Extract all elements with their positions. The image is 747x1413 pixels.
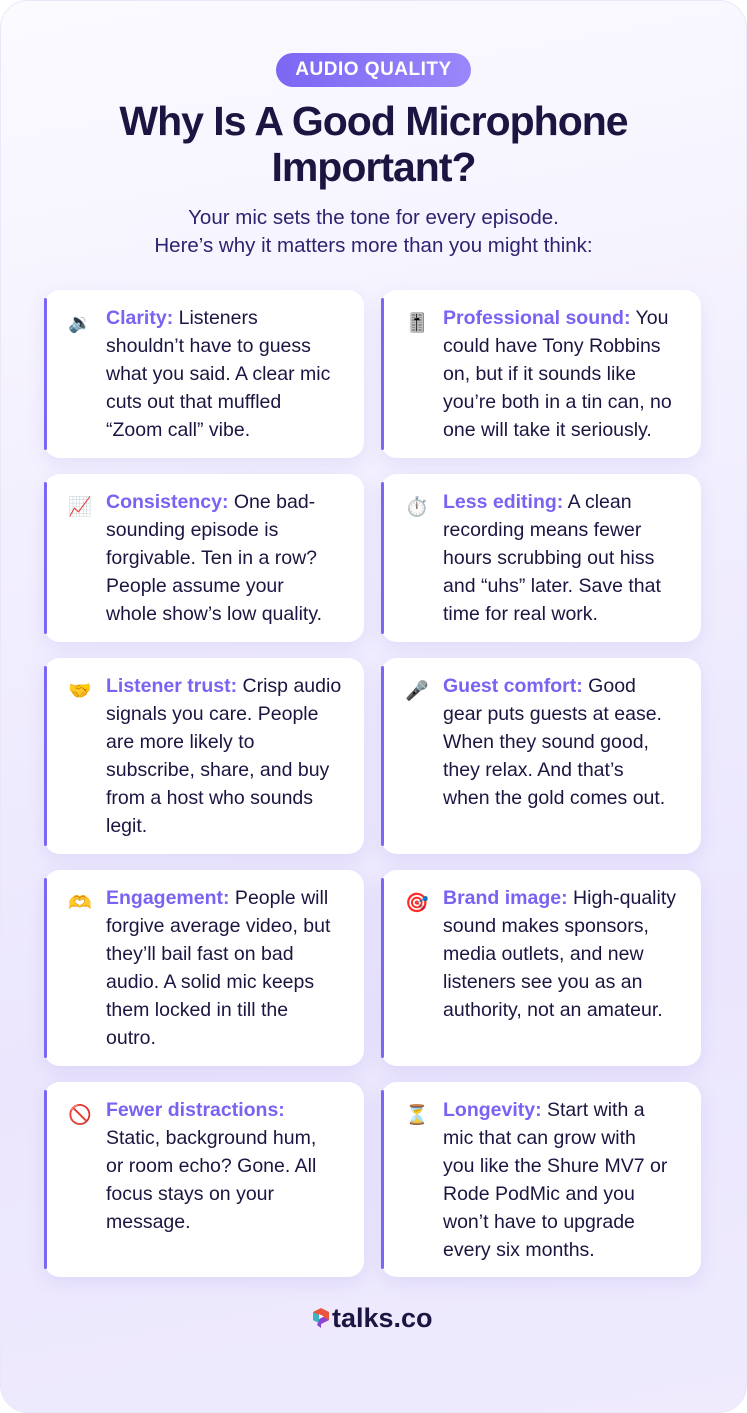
- card: guest comfort: 🎤: [405, 681, 429, 702]
- card: consistency: forgivable. Ten in a row?: [106, 547, 317, 569]
- card: engagement: them locked in till the: [106, 999, 288, 1021]
- card: clarity: 🔉: [68, 313, 92, 334]
- card: engagement: 🫶: [68, 893, 92, 914]
- card: listener trust: 🤝: [68, 681, 92, 702]
- card: less editing: ⏱️: [405, 497, 429, 518]
- card: longevity: won’t have to upgrade: [443, 1211, 635, 1233]
- badge: audio quality: [276, 53, 471, 87]
- card: listener trust: subscribe, share, and buy: [106, 759, 329, 781]
- card: brand image: media outlets, and new: [443, 943, 644, 965]
- card: guest comfort: [381, 658, 701, 854]
- title: Important?: [271, 144, 476, 190]
- card: engagement: [44, 870, 364, 1066]
- title: [119, 98, 628, 190]
- card: engagement: they’ll bail fast on bad: [106, 943, 294, 965]
- card: professional sound: could have Tony Robbins: [443, 335, 661, 357]
- card: consistency: Consistency: One bad-: [106, 491, 315, 513]
- card: consistency: [44, 474, 364, 642]
- card: less editing: [381, 474, 701, 642]
- card: clarity: [44, 290, 364, 458]
- title: Why Is A Good Microphone: [119, 98, 628, 144]
- card: brand image: listeners see you as an: [443, 971, 642, 993]
- card: brand image: Brand image: High-quality: [443, 887, 676, 909]
- card: longevity: ⏳: [405, 1105, 429, 1126]
- card: fewer distractions: 🚫: [68, 1105, 92, 1126]
- card: clarity: cuts out that muffled: [106, 391, 281, 413]
- card: guest comfort: Guest comfort: Good: [443, 675, 636, 697]
- logo: talks.co: talks.co: [332, 1302, 433, 1332]
- card: less editing: and “uhs” later. Save that: [443, 575, 661, 597]
- card: fewer distractions: or room echo? Gone. All: [106, 1155, 316, 1177]
- card: professional sound: you’re both in a tin can, no: [443, 391, 672, 413]
- card: longevity: you like the Shure MV7 or: [443, 1155, 667, 1177]
- card: listener trust: Listener trust: Crisp audio: [106, 675, 341, 697]
- card: longevity: every six months.: [443, 1239, 595, 1261]
- card: engagement: Engagement: People will: [106, 887, 328, 909]
- card: professional sound: [381, 290, 701, 458]
- card: fewer distractions: [44, 1082, 364, 1277]
- card: fewer distractions: Static, background hum,: [106, 1127, 316, 1149]
- card: clarity: what you said. A clear mic: [106, 363, 330, 385]
- card: professional sound: 🎚️: [405, 313, 429, 334]
- card: engagement: forgive average video, but: [106, 915, 330, 937]
- card: engagement: audio. A solid mic keeps: [106, 971, 314, 993]
- card: consistency: whole show’s low quality.: [106, 603, 322, 625]
- subtitle: Your mic sets the tone for every episode.: [188, 206, 559, 229]
- card: listener trust: from a host who sounds: [106, 787, 313, 809]
- card: less editing: hours scrubbing out hiss: [443, 547, 654, 569]
- card: less editing: recording means fewer: [443, 519, 641, 541]
- card: guest comfort: When they sound good,: [443, 731, 649, 753]
- card: consistency: 📈: [68, 497, 92, 518]
- card: fewer distractions: focus stays on your: [106, 1183, 274, 1205]
- card: listener trust: are more likely to: [106, 731, 254, 753]
- card: professional sound: on, but if it sounds like: [443, 363, 636, 385]
- card: brand image: 🎯: [405, 893, 429, 914]
- card: guest comfort: when the gold comes out.: [443, 787, 665, 809]
- card: fewer distractions: message.: [106, 1211, 191, 1233]
- card: guest comfort: they relax. And that’s: [443, 759, 624, 781]
- card: brand image: [381, 870, 701, 1066]
- card: longevity: mic that can grow with: [443, 1127, 636, 1149]
- card: listener trust: legit.: [106, 815, 147, 837]
- card: guest comfort: gear puts guests at ease.: [443, 703, 662, 725]
- card: professional sound: Professional sound: You: [443, 307, 668, 329]
- card: listener trust: [44, 658, 364, 854]
- card: less editing: Less editing: A clean: [443, 491, 632, 513]
- subtitle: Here’s why it matters more than you might think:: [154, 234, 593, 257]
- card: clarity: shouldn’t have to guess: [106, 335, 311, 357]
- card: less editing: time for real work.: [443, 603, 598, 625]
- card: longevity: [381, 1082, 701, 1277]
- card: clarity: Clarity: Listeners: [106, 307, 258, 329]
- subtitle: [154, 206, 593, 257]
- badge: audio quality: AUDIO QUALITY: [295, 59, 452, 80]
- card: consistency: sounding episode is: [106, 519, 278, 541]
- card: consistency: People assume your: [106, 575, 284, 597]
- card: fewer distractions: Fewer distractions:: [106, 1099, 285, 1121]
- card: brand image: sound makes sponsors,: [443, 915, 649, 937]
- card: longevity: Rode PodMic and you: [443, 1183, 635, 1205]
- card: engagement: outro.: [106, 1027, 156, 1049]
- card: brand image: authority, not an amateur.: [443, 999, 663, 1021]
- card: professional sound: one will take it seriously.: [443, 419, 652, 441]
- card: clarity: “Zoom call” vibe.: [106, 419, 250, 441]
- card: listener trust: signals you care. People: [106, 703, 318, 725]
- card: longevity: Longevity: Start with a: [443, 1099, 645, 1121]
